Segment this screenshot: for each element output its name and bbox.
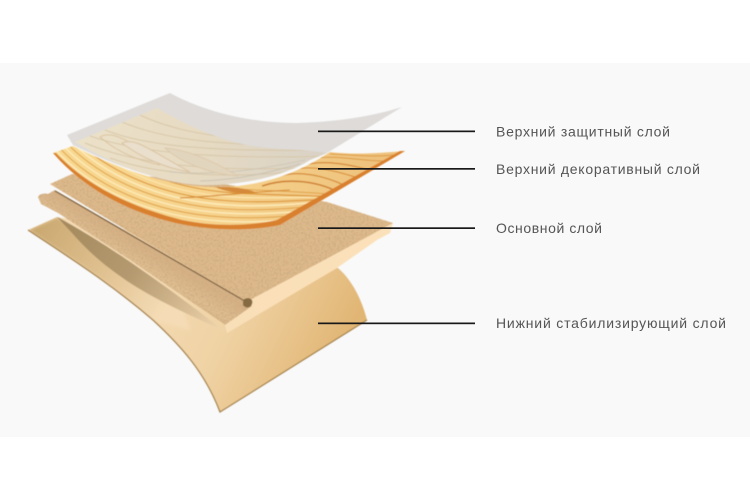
leader line: stabilizing layer: [318, 322, 475, 324]
core front edge: [225, 223, 393, 333]
layer: protective film: [67, 93, 402, 185]
wood eye: [215, 187, 258, 193]
core groove hook: [243, 298, 252, 308]
leader line: decorative layer: [318, 168, 475, 170]
core tongue: [38, 190, 252, 326]
film wood print: [75, 108, 327, 185]
wood right grain: [262, 181, 338, 192]
label: core layer: Основной слой: [496, 220, 602, 236]
wood orange edge: [53, 151, 405, 229]
leader line: protective layer: [318, 130, 475, 132]
core groove line: [55, 191, 243, 300]
label: protective layer: Верхний защитный слой: [496, 124, 670, 140]
core shadowed groove: [57, 217, 226, 332]
core top surface: [50, 174, 393, 300]
wood grain: [56, 146, 394, 223]
label: decorative layer: Верхний декоративный слой: [496, 161, 700, 177]
background band: [0, 63, 750, 437]
layer: core board: [38, 174, 393, 333]
layer: decorative wood veneer: [52, 146, 406, 230]
illustration: laminate layers: [28, 93, 405, 412]
film grain: [85, 115, 330, 181]
sheet left band: [28, 217, 190, 330]
label: stabilizing layer: Нижний стабилизирующий слой: [496, 315, 726, 331]
layer: bottom stabilizing sheet: [28, 217, 367, 412]
leader line: core layer: [318, 227, 475, 229]
